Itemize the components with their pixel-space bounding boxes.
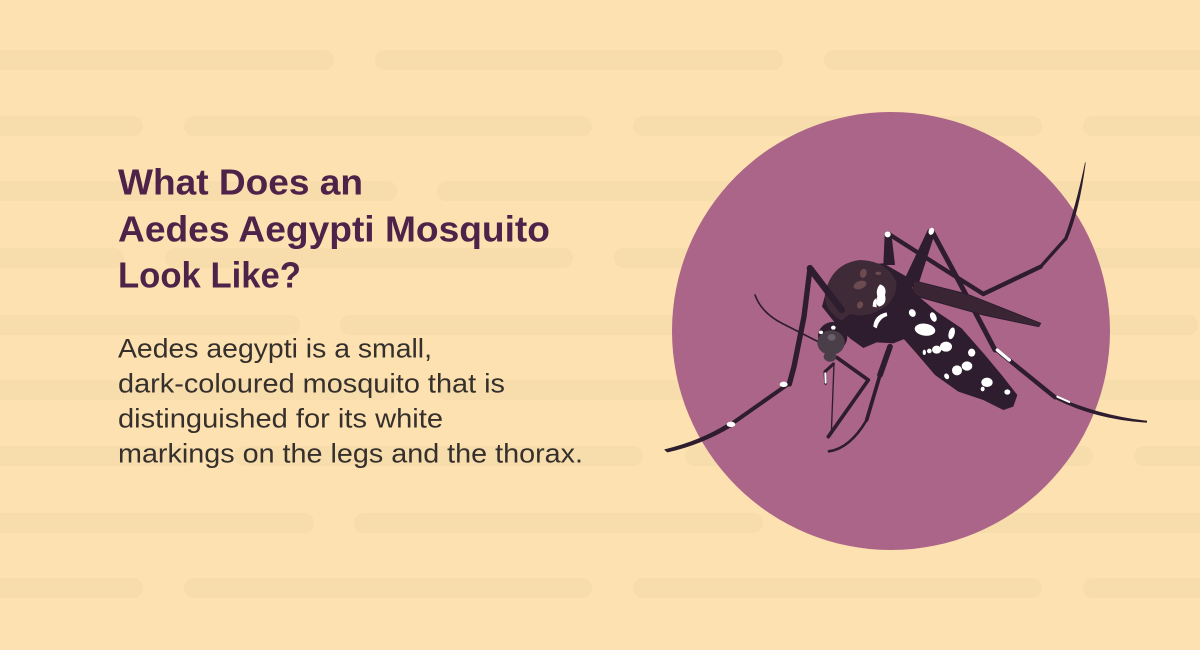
thorax [822,263,918,348]
abdomen [902,293,1017,410]
white markings [873,284,1010,395]
text block: description [118,334,583,468]
text block: description: distinguished for its white [118,404,443,434]
title [118,162,550,296]
proboscis [831,363,834,433]
palp [825,364,833,383]
text block: description: markings on the legs and the thorax. [118,438,583,468]
foreleg near head [828,357,868,437]
rear leg [903,227,1147,422]
circle background [672,112,1110,550]
scutum markings [852,268,881,310]
wing [913,281,1041,327]
text block: description: dark-coloured mosquito that is [118,368,505,398]
title: Look Like? [118,254,301,296]
text block: description: Aedes aegypti is a small, [118,334,432,364]
icon: mosquito [665,163,1147,452]
antenna [755,295,820,343]
head [817,322,847,362]
title: Aedes Aegypti Mosquito [118,208,550,250]
title: What Does an [118,162,363,202]
middle leg [829,347,890,451]
hind leg with long tip [883,163,1085,294]
scutum [825,260,897,321]
front leg [665,268,842,452]
